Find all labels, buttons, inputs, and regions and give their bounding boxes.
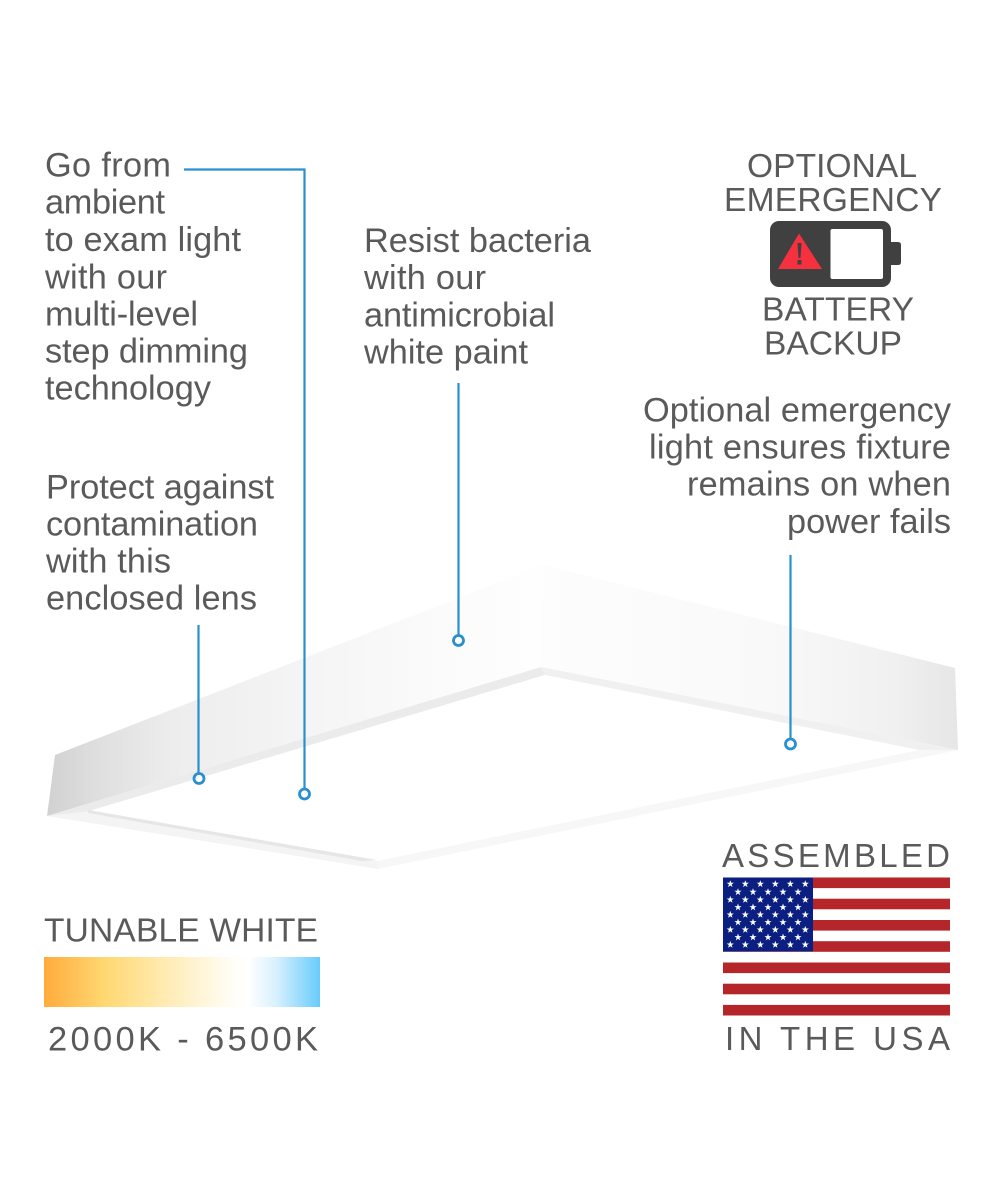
lit lens panel [92,675,919,859]
fixture inner rim, back left [47,667,545,816]
badge: optional emergency battery backup [724,148,942,362]
badge: optional emergency battery backup: OPTIONAL [747,148,917,185]
fixture left side face [47,565,543,816]
badge: tunable white: 2000K - 6500K [48,1020,318,1058]
callout text: antimicrobial paint: Resist bacteria [364,222,592,260]
callout text: antimicrobial paint: antimicrobial [364,296,555,334]
light fixture [47,565,958,869]
fixture right side face [541,565,958,750]
badge: optional emergency battery backup: BACKUP [764,326,902,362]
callout text: emergency light [643,392,952,541]
callout text: step dimming: multi-level [45,296,198,334]
callout text: enclosed lens [45,468,274,618]
leader line: enclosed lens [194,625,204,784]
callout text: antimicrobial paint: white paint [363,334,528,372]
callout text: antimicrobial paint: with our [363,259,486,297]
callout text: step dimming [44,146,248,408]
fixture inner rim, back right [541,667,958,750]
leader line: antimicrobial paint [454,383,464,646]
icon: battery with warning [770,221,901,287]
badge: tunable white [44,912,320,1058]
color temperature gradient bar [44,957,320,1007]
callout text: step dimming: technology [45,370,212,408]
callout text: step dimming: with our [44,258,167,296]
callout text: step dimming: to exam light [45,221,241,259]
badge: assembled in the USA [722,837,950,1057]
badge: assembled in the USA: IN THE USA [725,1020,950,1057]
fixture front rim shadow line [88,810,377,861]
callout text: enclosed lens: Protect against [46,468,274,506]
callout text: step dimming: Go from [45,146,171,184]
callout text: emergency light: power fails [787,503,951,541]
callout text: enclosed lens: contamination [46,506,258,544]
leader line: emergency light [786,555,796,749]
callout text: step dimming: step dimming [45,332,248,370]
callout text: emergency light: remains on when [687,466,951,504]
callout text: enclosed lens: enclosed lens [46,580,257,618]
badge: assembled in the USA: ASSEMBLED [722,837,950,874]
badge: optional emergency battery backup: EMERGENCY [724,182,942,219]
icon: US flag [723,877,950,1016]
badge: tunable white: TUNABLE WHITE [44,912,318,950]
callout text: enclosed lens: with this [45,542,171,580]
callout text: step dimming: ambient [45,184,165,222]
fixture front rim, left [47,811,378,869]
leader line: step dimming [184,170,310,799]
callout text: antimicrobial paint [363,222,592,372]
callout text: emergency light: light ensures fixture [649,428,951,466]
badge: optional emergency battery backup: BATTERY [762,292,914,328]
callout text: emergency light: Optional emergency [643,392,952,430]
fixture front rim, right [377,750,958,869]
